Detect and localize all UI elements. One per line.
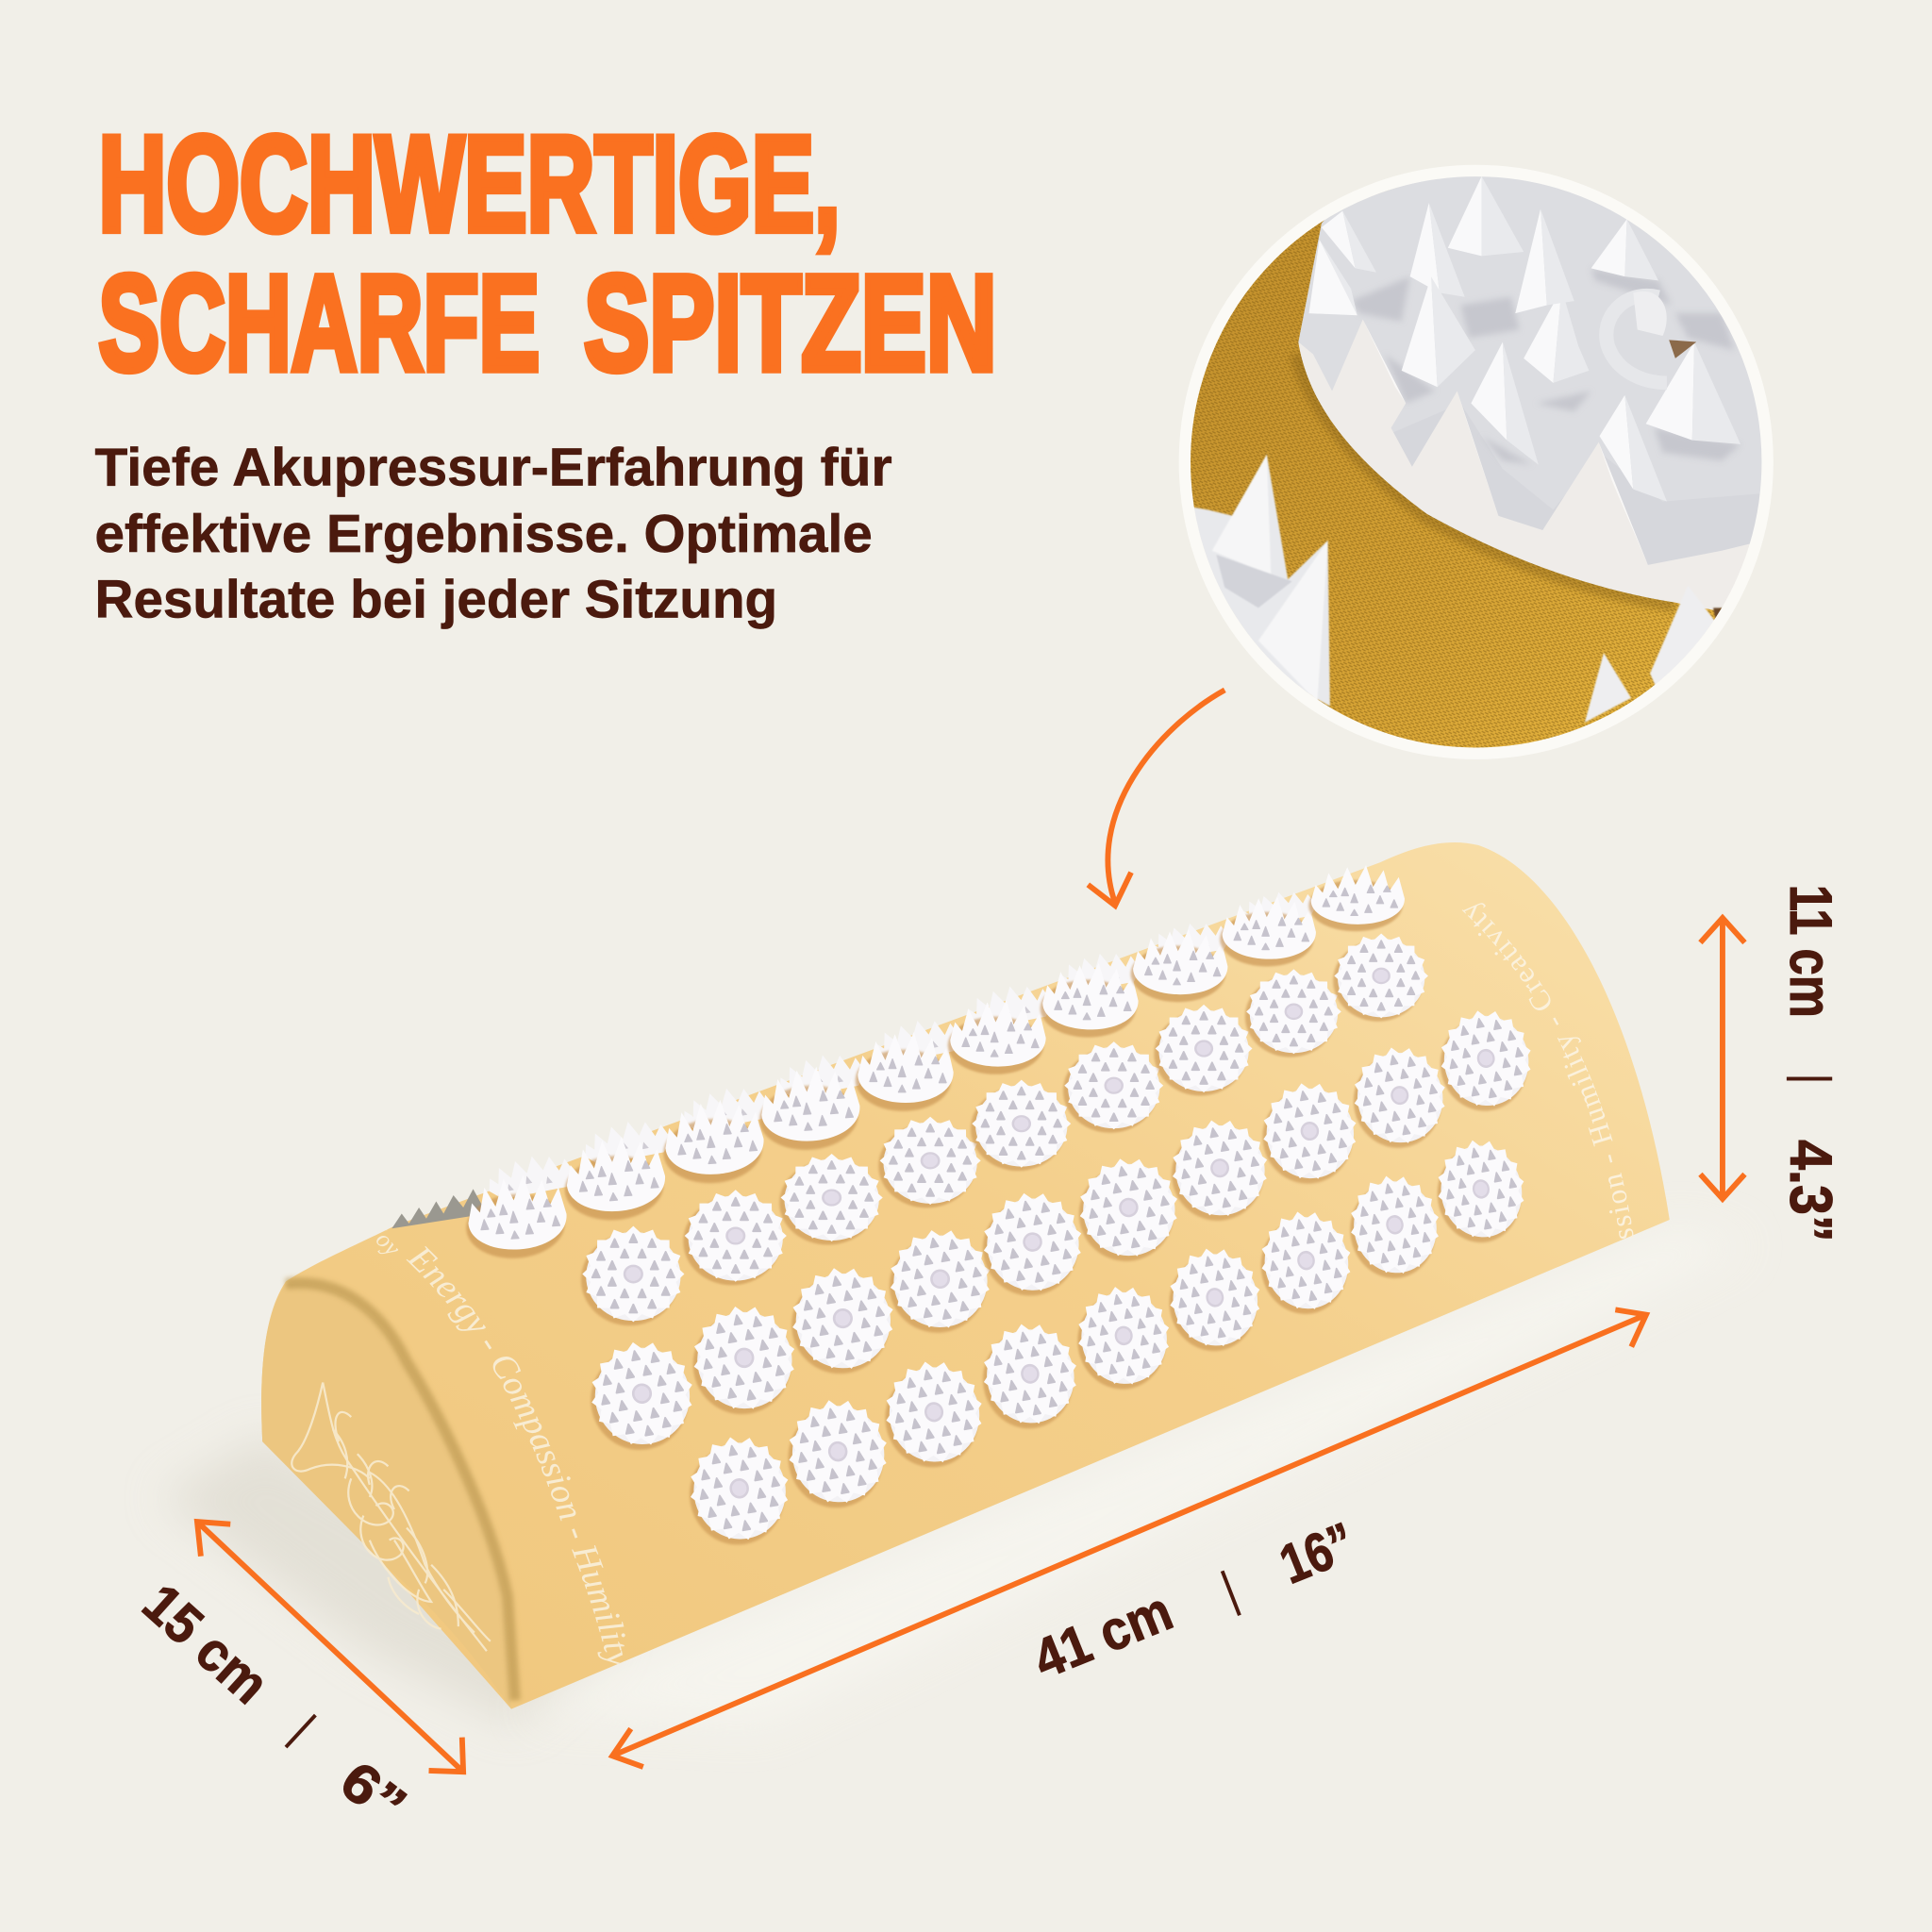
label: length: 41 cm xyxy=(1025,1580,1181,1690)
title xyxy=(98,108,997,399)
back spikes along ridge xyxy=(391,887,1320,1228)
third row discs xyxy=(581,1003,1540,1457)
description text xyxy=(95,438,892,628)
dark gap xyxy=(1669,340,1696,358)
pillow body xyxy=(261,842,1670,1709)
large spiked disc xyxy=(1298,158,1789,610)
title: HOCHWERTIGE, xyxy=(98,108,841,259)
label: length xyxy=(1025,1511,1363,1690)
description text: Tiefe Akupressur-Erfahrung für xyxy=(95,438,892,497)
pillow lettering front: Energy - Compassion - Humility xyxy=(406,1246,625,1664)
seam xyxy=(286,1283,515,1700)
pillow xyxy=(261,842,1670,1709)
lower right spikes xyxy=(1584,604,1723,723)
arrow: height xyxy=(1700,918,1744,1199)
front row discs xyxy=(680,1133,1533,1552)
circle border xyxy=(1185,171,1768,754)
ground shadow xyxy=(160,1226,1750,1725)
label: length: 16” xyxy=(1272,1511,1363,1596)
description text: Resultate bei jeder Sitzung xyxy=(95,569,777,628)
lower left spikes xyxy=(1194,454,1331,708)
pillow lettering front: Joy xyxy=(363,1218,407,1261)
label: height xyxy=(1777,885,1843,1242)
label: width xyxy=(131,1573,417,1838)
pillow end cap xyxy=(261,1284,511,1709)
arrow: length xyxy=(612,1309,1646,1767)
detail photo circle xyxy=(1153,154,1789,768)
title: SCHARFE xyxy=(98,248,540,399)
pillow lettering back: ssion - Humility - Creativity xyxy=(1462,903,1634,1240)
arrow: detail to pillow xyxy=(1088,690,1224,906)
title: SPITZEN xyxy=(584,248,997,399)
label: height: 11 cm xyxy=(1777,885,1843,1018)
disc rim with spikes xyxy=(1298,320,1789,610)
fabric xyxy=(1191,187,1723,747)
second row discs xyxy=(581,933,1428,1325)
end cap ornament xyxy=(291,1382,491,1651)
top row discs xyxy=(463,865,1405,1261)
label: width: 15 cm xyxy=(131,1573,280,1716)
label: width: 6” xyxy=(329,1750,417,1838)
infographic canvas xyxy=(94,132,1833,1806)
arrow: width xyxy=(197,1522,463,1772)
spike discs xyxy=(463,865,1540,1552)
description text: effektive Ergebnisse. Optimale xyxy=(95,504,873,563)
crescent xyxy=(1607,295,1667,383)
label: height: 4.3” xyxy=(1777,1140,1843,1242)
